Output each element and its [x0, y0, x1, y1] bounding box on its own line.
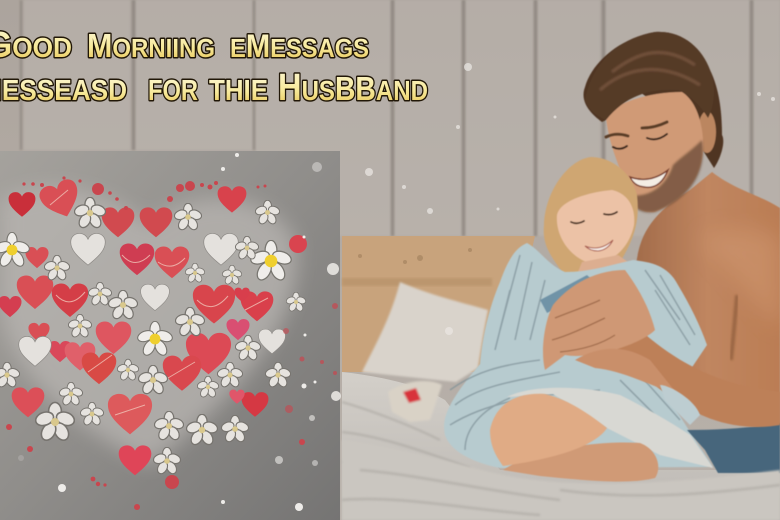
pillow: [362, 282, 488, 382]
white snow dots: [18, 153, 341, 511]
blanket: [444, 243, 713, 468]
man eyes: [606, 122, 667, 149]
man beard: [628, 140, 703, 212]
red confetti dots: [6, 176, 338, 510]
man fringe hair: [585, 32, 714, 120]
man ear: [698, 111, 716, 153]
heart curl details: [50, 190, 268, 415]
man smile: [630, 170, 668, 187]
man body: [620, 172, 780, 425]
flowers: [0, 197, 307, 476]
bedding: [342, 372, 780, 520]
headboard: [342, 236, 535, 372]
arm crease: [731, 295, 737, 360]
white hearts: [19, 233, 285, 366]
man's arm and hands: [543, 270, 780, 427]
child face: [557, 190, 634, 264]
heart collage panel: [0, 151, 341, 520]
title: FOR: [148, 75, 198, 107]
red object on bed: [388, 381, 442, 422]
title: MORNIING: [87, 27, 215, 64]
hair strands: [600, 52, 700, 90]
soft grey clutter behind collage: [0, 187, 297, 465]
child eyes: [571, 212, 617, 223]
child neck: [578, 255, 628, 272]
man: [584, 32, 780, 425]
blue cloth: [540, 275, 598, 313]
chest highlight: [700, 229, 780, 330]
child: [544, 157, 638, 276]
snow dots over photo: [365, 63, 775, 335]
sleeve near elbow: [660, 385, 700, 425]
title: HUSBBAND: [278, 67, 428, 109]
red balloon: [289, 235, 307, 253]
front bedding folds: [342, 440, 780, 520]
title: [0, 24, 428, 109]
title: EMESSAGS: [230, 28, 369, 64]
blue trousers: [687, 423, 780, 473]
child smile: [585, 240, 613, 251]
man hair: [584, 32, 723, 168]
legs: [490, 394, 658, 482]
man face: [606, 92, 703, 212]
hearts: [0, 177, 273, 475]
title: THIE: [209, 75, 268, 107]
child hair: [544, 157, 638, 276]
